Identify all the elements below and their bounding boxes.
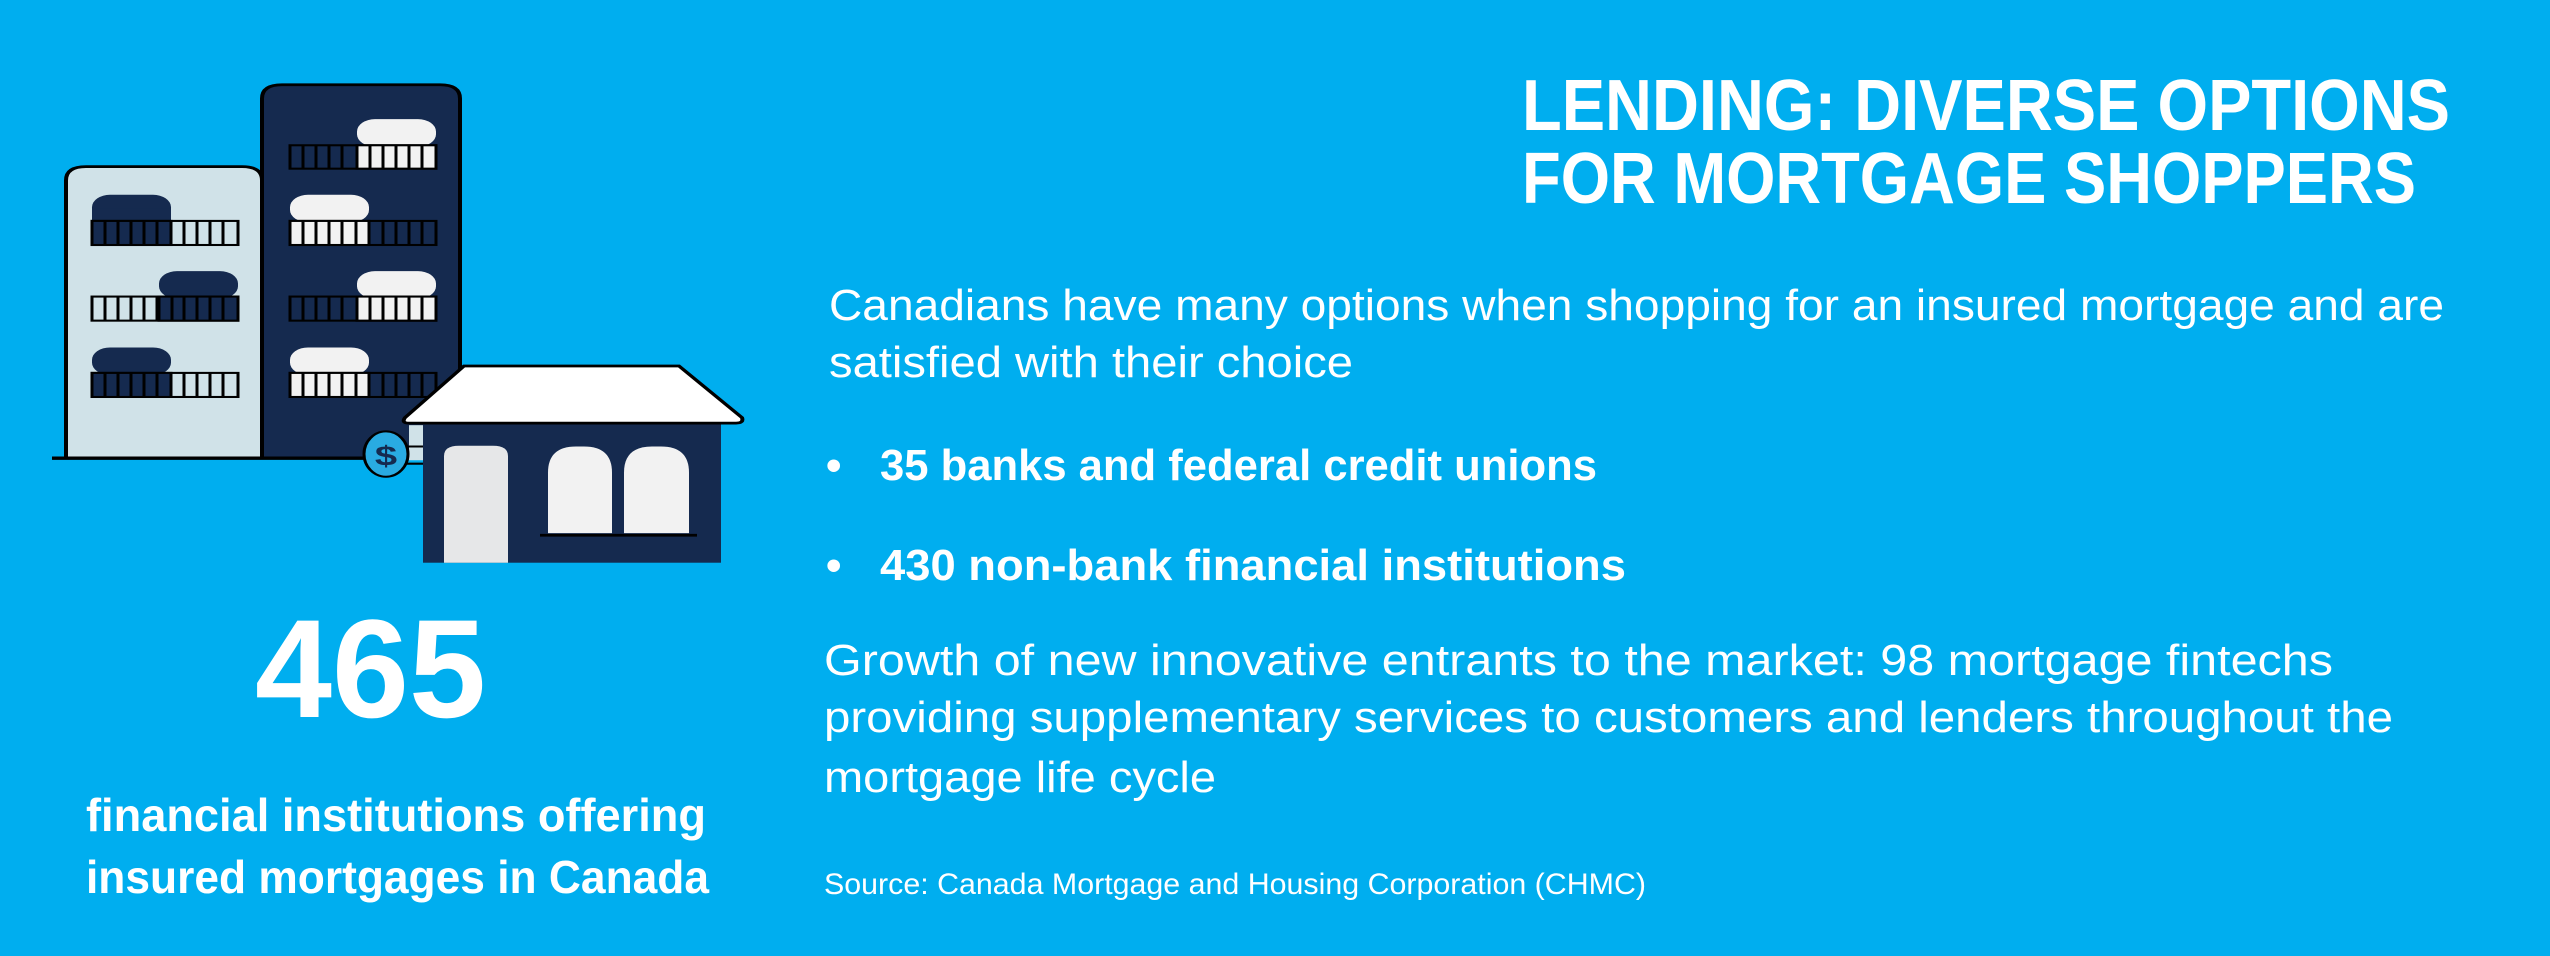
icon: bank house: [404, 366, 742, 563]
intro paragraph: satisfied with their choice: [829, 338, 1353, 387]
title: LENDING: DIVERSE OPTIONS: [1522, 66, 2450, 146]
bullet list: 430 non-bank financial institutions: [880, 541, 1626, 590]
fintech paragraph: providing supplementary services to customers and lenders throughout the: [824, 693, 2393, 742]
big number 465: 465: [255, 590, 486, 747]
caption: financial institutions: [86, 789, 709, 903]
illustration: buildings and bank: [52, 85, 742, 563]
icon: dollar coin: [364, 431, 433, 477]
icon: tall apartment building: [262, 85, 460, 458]
caption: financial institutions: financial institutions offering: [86, 789, 706, 841]
fintech paragraph: Growth of new innovative entrants to the market: 98 mortgage fintechs: [824, 636, 2333, 685]
intro paragraph: Canadians have many options when shopping for an insured mortgage and are: [829, 281, 2444, 330]
title: [1522, 66, 2450, 219]
source note: Source: Canada Mortgage and Housing Corporation (CHMC): [824, 868, 1646, 901]
title: FOR MORTGAGE SHOPPERS: [1522, 139, 2416, 219]
caption: financial institutions: insured mortgages in Canada: [86, 851, 709, 903]
icon: left apartment building: [66, 167, 262, 458]
bullet list: 35 banks and federal credit unions: [880, 441, 1597, 490]
fintech paragraph: mortgage life cycle: [824, 753, 1216, 802]
intro paragraph: [829, 281, 2444, 387]
fintech paragraph: [824, 636, 2393, 802]
bullet list: •: [826, 541, 841, 590]
bullet list: •: [826, 441, 841, 490]
icon: dollar coin: $: [375, 442, 397, 472]
bullet list: [826, 441, 1626, 590]
